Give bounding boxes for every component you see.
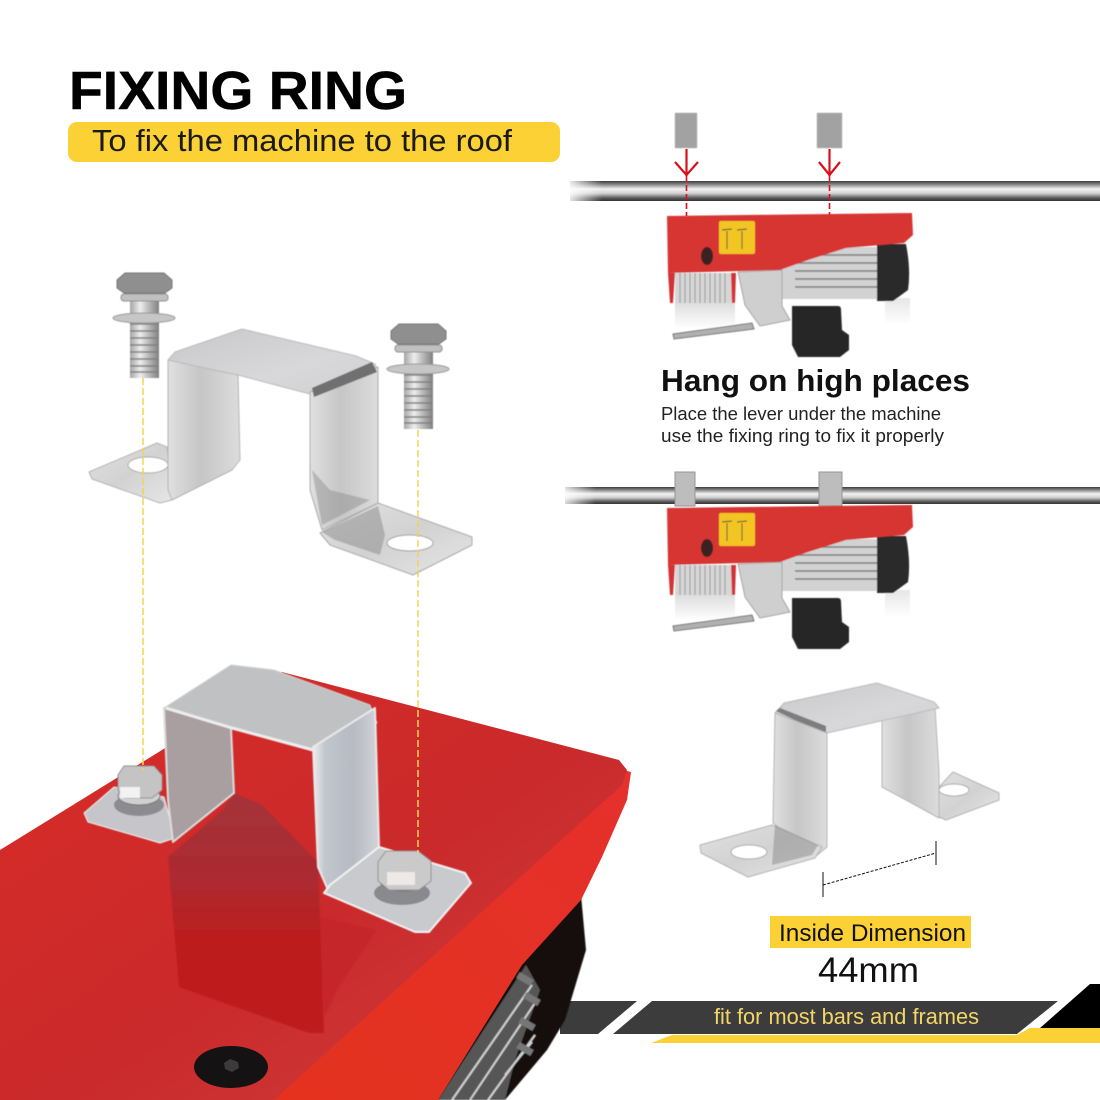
housing side (270, 770, 631, 1100)
mounted bracket (84, 665, 471, 932)
dimension line (823, 841, 936, 897)
dimension value: 44mm (818, 951, 919, 990)
inner panel (882, 708, 939, 818)
hang description: use the fixing ring to fix it properly (661, 426, 944, 446)
inside dimension label: Inside Dimension (779, 920, 966, 947)
falling fixing rings (675, 113, 842, 148)
right bolt (374, 851, 431, 905)
red hoist housing (0, 672, 631, 1100)
right foot of bracket (320, 503, 472, 575)
inner panel of bracket (168, 360, 240, 500)
left plate (84, 787, 175, 843)
motor behind red housing (430, 880, 586, 1100)
left foot of bracket (89, 443, 172, 503)
footer ribbon: fit for most bars and frames (714, 1004, 979, 1029)
bracket reflection (168, 793, 377, 1033)
yellow guide lines (143, 378, 418, 853)
left bolt (113, 273, 175, 378)
subtitle banner: To fix the machine to the roof (92, 123, 512, 158)
dimension bracket (700, 683, 999, 877)
plug (194, 1046, 268, 1088)
right panel (313, 708, 379, 890)
left bolt (114, 766, 164, 816)
left foot (700, 825, 822, 877)
hang heading: Hang on high places (661, 363, 970, 398)
title: FIXING RING (69, 61, 407, 121)
hang description: Place the lever under the machine (661, 404, 941, 424)
left panel (773, 713, 827, 857)
right foot (939, 772, 999, 820)
exploded bracket with bolts (89, 273, 472, 575)
lower rail (558, 485, 1100, 506)
top face of bracket (168, 329, 378, 394)
top face (164, 665, 377, 750)
housing top (0, 672, 627, 1100)
right bolt (387, 324, 449, 429)
left inner panel (164, 708, 234, 842)
upper hoist (667, 213, 913, 357)
right panel of bracket (310, 362, 378, 530)
lower hoist (667, 505, 913, 649)
hang description (661, 404, 944, 446)
footer ribbon (560, 984, 1100, 1043)
top face (775, 683, 939, 733)
right plate (324, 847, 471, 932)
red arrows (675, 149, 840, 216)
top rail (565, 179, 1100, 203)
mounted fixing rings (675, 472, 842, 506)
